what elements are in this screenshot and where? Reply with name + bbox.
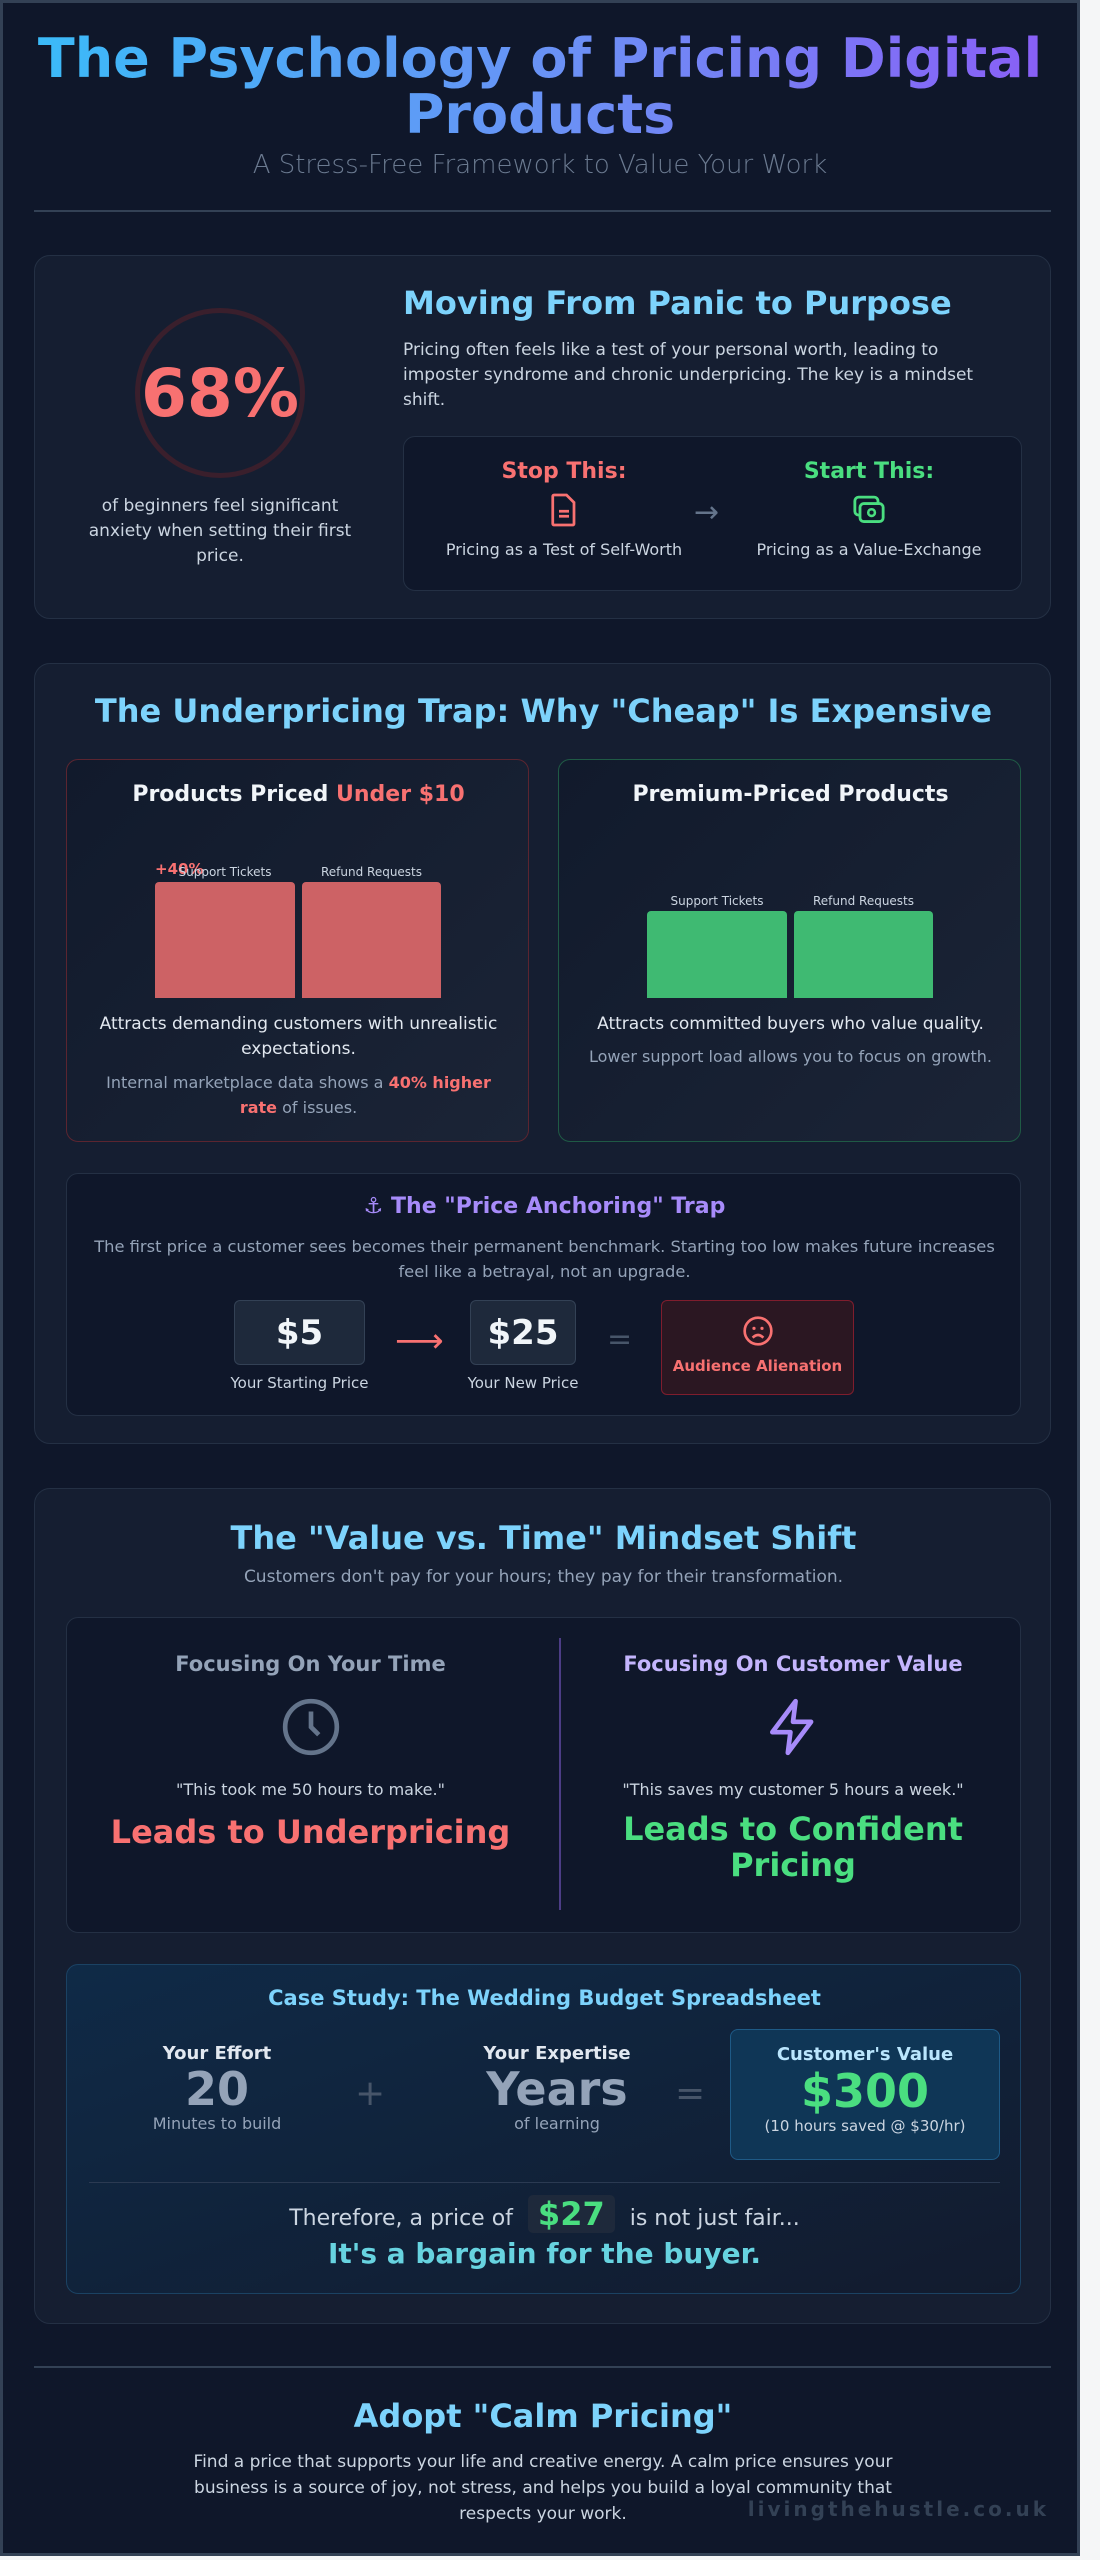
left column: time: Leads to Underpricing (111, 1813, 510, 1851)
bar chart: low price: +40% (155, 860, 203, 878)
stop/start box (403, 436, 1022, 591)
$5 (234, 1300, 365, 1365)
left column: time: "This took me 50 hours to make." (176, 1780, 445, 1799)
anchoring title: ⚓ The "Price Anchoring" Trap (364, 1194, 725, 1219)
bar chart: premium (647, 894, 933, 998)
box: price anchoring (66, 1173, 1021, 1416)
bar chart: low price: Support Tickets (178, 865, 272, 879)
bar chart: low price (155, 860, 441, 998)
customer value: $300 (801, 2064, 929, 2118)
icon: clock (282, 1698, 340, 1756)
your expertise (483, 2043, 631, 2133)
box: price anchoring: Your Starting Price (230, 1374, 368, 1392)
your expertise: Years (486, 2062, 628, 2116)
your effort: Minutes to build (153, 2114, 281, 2133)
panel: panic to purpose (34, 255, 1051, 619)
heading: The Underpricing Trap: Why "Cheap" Is Expensive (95, 692, 992, 730)
customer value: (10 hours saved @ $30/hr) (764, 2117, 966, 2135)
right column: value (622, 1652, 964, 1884)
alienation: Audience Alienation (673, 1357, 842, 1375)
conclusion (289, 2195, 800, 2233)
card: under $10: Products Priced Under $10 (132, 782, 465, 807)
panel: underpricing trap (34, 663, 1051, 1444)
bar chart: premium: Support Tickets (670, 894, 764, 908)
box: price anchoring: The first price a customer sees becomes their permanent benchmark. Starting too low makes future increases feel like a betrayal, not an upgrade. (94, 1237, 995, 1281)
right column: value: Focusing On Customer Value (623, 1652, 963, 1676)
icon: document (551, 494, 576, 526)
case study: It's a bargain for the buyer. (328, 2237, 761, 2270)
stat circle 68%: 68% (141, 354, 299, 432)
card: premium (558, 759, 1021, 1142)
compare box (66, 1617, 1021, 1933)
start this: Start This: (804, 459, 934, 484)
icon: money (853, 496, 885, 523)
case study (66, 1964, 1021, 2294)
your expertise: of learning (514, 2114, 600, 2133)
case study: + (355, 2073, 385, 2114)
box: price anchoring: Your New Price (468, 1374, 578, 1392)
right column: value: Leads to Confident Pricing (623, 1810, 963, 1884)
icon: lightning (770, 1698, 814, 1756)
arrow: → (694, 495, 719, 530)
start this: Pricing as a Value-Exchange (756, 540, 982, 559)
stop this (446, 459, 682, 559)
alienation (661, 1300, 854, 1395)
right column: value: "This saves my customer 5 hours a week." (622, 1780, 964, 1799)
$25 (470, 1300, 576, 1365)
closing heading: Adopt "Calm Pricing" (354, 2397, 732, 2435)
customer value (730, 2029, 1000, 2160)
conclusion: Therefore, a price of is not just fair... (289, 2206, 800, 2231)
$25: $25 (488, 1312, 558, 1352)
paragraph: Pricing often feels like a test of your personal worth, leading to imposter syndrome and chronic underpricing. The key is a mindset shift. (403, 340, 973, 410)
customer value: Customer's Value (777, 2044, 953, 2065)
conclusion: $27 (538, 2195, 605, 2233)
left column: time: Focusing On Your Time (175, 1652, 446, 1676)
case study: = (675, 2073, 705, 2114)
stop this: Stop This: (502, 459, 626, 484)
heading: The "Value vs. Time" Mindset Shift (231, 1519, 856, 1557)
your effort: Your Effort (163, 2043, 271, 2064)
subtitle: A Stress-Free Framework to Value Your Work (253, 150, 827, 180)
card: premium: Lower support load allows you to focus on growth. (589, 1047, 992, 1066)
bar chart: low price: Refund Requests (321, 865, 422, 879)
card: under $10 (66, 759, 529, 1142)
your effort (153, 2043, 281, 2133)
stat caption: of beginners feel significant anxiety when setting their first price. (89, 496, 351, 566)
card: premium: Attracts committed buyers who value quality. (597, 1014, 984, 1034)
your effort: 20 (185, 2062, 249, 2116)
watermark: livingthehustle.co.uk (748, 2497, 1049, 2521)
arrow: ⟶ (395, 1321, 444, 1361)
heading: Moving From Panic to Purpose (403, 284, 952, 322)
left column: time (111, 1652, 510, 1851)
card: premium: Premium-Priced Products (632, 782, 949, 807)
closing text: Find a price that supports your life and creative energy. A calm price ensures your business is a source of joy, not stress, and helps you build a loyal community that respects your work. (194, 2452, 892, 2524)
case study: Case Study: The Wedding Budget Spreadsheet (268, 1986, 821, 2010)
card: under $10: Attracts demanding customers with unrealistic expectations. (100, 1014, 497, 1059)
card: under $10: Internal marketplace data shows a 40% higher rate of issues. (106, 1073, 491, 1117)
panel: value vs time: Customers don't pay for your hours; they pay for their transformation. (244, 1567, 843, 1587)
your expertise: Your Expertise (483, 2043, 631, 2064)
title: The Psychology of Pricing Digital Products (38, 27, 1042, 146)
stat circle 68% (135, 308, 305, 478)
start this (756, 459, 982, 559)
stop this: Pricing as a Test of Self-Worth (446, 540, 682, 559)
panel: value vs time (34, 1488, 1051, 2324)
box: price anchoring: = (607, 1322, 632, 1357)
bar chart: premium: Refund Requests (813, 894, 914, 908)
$5: $5 (276, 1312, 323, 1352)
